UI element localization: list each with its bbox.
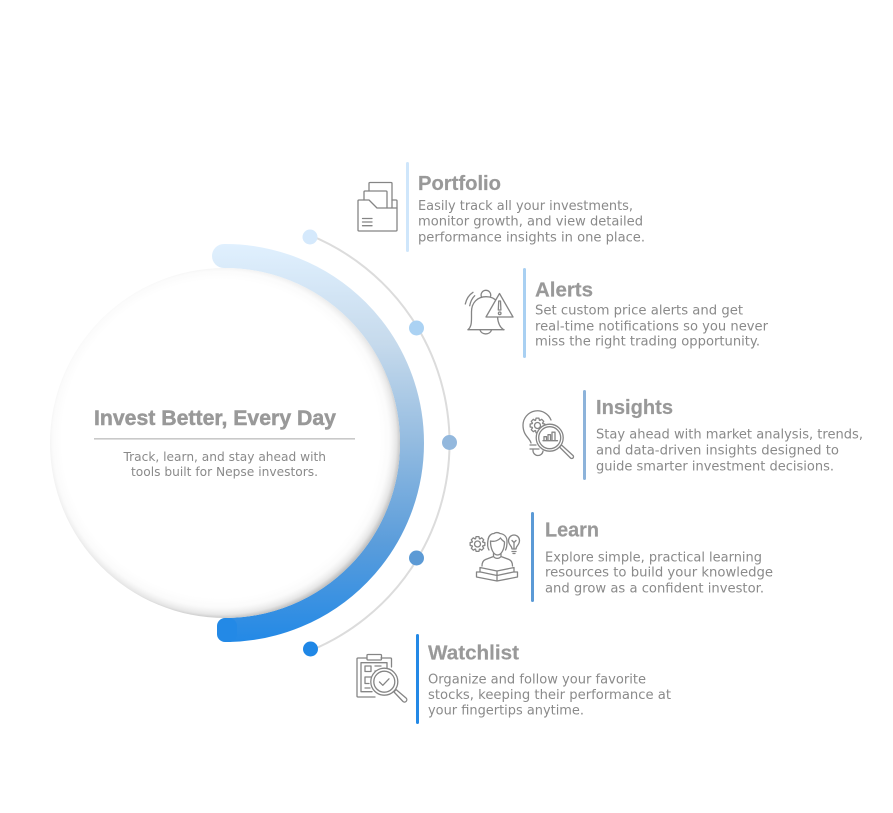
icon: bell with warning — [465, 290, 513, 334]
gradient progress band — [212, 244, 412, 642]
description: Stay ahead with market analysis, trends, — [596, 428, 863, 442]
center description: Track, learn, and stay ahead with — [123, 449, 326, 464]
description: real-time notifications so you never — [535, 320, 769, 334]
description: miss the right trading opportunity. — [535, 334, 760, 350]
description: performance insights in one place. — [418, 230, 645, 246]
center circle — [50, 268, 400, 618]
dot: watchlist — [303, 642, 318, 656]
heading: Alerts — [535, 278, 593, 302]
dot: alerts — [409, 320, 424, 336]
center heading: Invest Better, Every Day — [94, 406, 336, 430]
dot: learn — [409, 550, 424, 566]
panel: alerts — [465, 268, 769, 358]
panel: learn — [470, 512, 773, 602]
connector arc — [310, 235, 450, 651]
description: your fingertips anytime. — [428, 704, 584, 718]
description: guide smarter investment decisions. — [596, 460, 834, 474]
description: and data-driven insights designed to — [596, 444, 839, 458]
icon: learner with book — [470, 533, 520, 581]
accent bar — [531, 512, 534, 602]
accent bar — [416, 634, 419, 724]
description: and grow as a confident investor. — [545, 582, 764, 596]
description — [418, 199, 645, 246]
panel: portfolio — [358, 162, 645, 252]
center description — [123, 449, 326, 479]
description: monitor growth, and view detailed — [418, 214, 643, 230]
center text block — [94, 406, 355, 479]
accent bar — [523, 268, 526, 358]
description — [535, 304, 769, 350]
description — [545, 550, 773, 596]
icon: folder — [358, 182, 397, 231]
center description: tools built for Nepse investors. — [131, 464, 318, 479]
accent bar — [406, 162, 409, 252]
description: Explore simple, practical learning — [545, 550, 762, 566]
accent bar — [583, 390, 586, 480]
dot: portfolio — [302, 230, 318, 244]
dot: insights — [442, 435, 457, 450]
description: Easily track all your investments, — [418, 199, 633, 214]
heading: Watchlist — [428, 642, 519, 664]
heading: Portfolio — [418, 172, 501, 195]
description: Set custom price alerts and get — [535, 304, 743, 318]
heading: Insights — [596, 396, 673, 419]
panel: insights — [523, 390, 863, 480]
center divider — [94, 438, 355, 440]
description: resources to build your knowledge — [545, 566, 773, 580]
panel: watchlist — [357, 634, 671, 724]
icon: clipboard and magnifier — [357, 654, 407, 702]
description: Organize and follow your favorite — [428, 672, 646, 688]
heading: Learn — [545, 518, 599, 542]
icon: bulb and magnifier — [523, 411, 574, 459]
description: stocks, keeping their performance at — [428, 688, 671, 703]
description — [428, 672, 671, 718]
description — [596, 428, 863, 474]
